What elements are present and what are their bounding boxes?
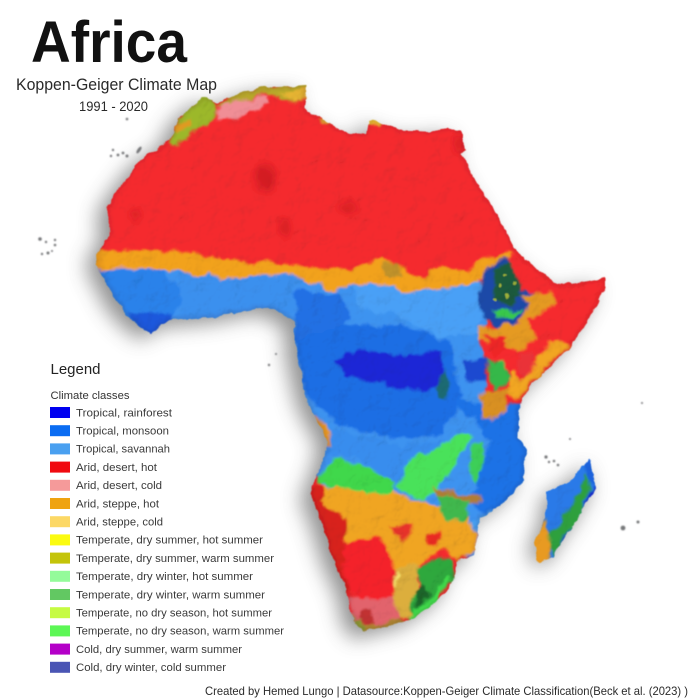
islands: Cape Verde: [38, 237, 56, 255]
region: blue savanna base: [98, 264, 494, 559]
legend item: Arid, steppe, hot: Arid, steppe, hot: [76, 498, 159, 510]
region: Cameroon monsoon: [295, 290, 352, 345]
legend subheading: Climate classes: [50, 390, 130, 402]
region: Tanzania steppe: [480, 388, 508, 422]
region: Gabon steppe: [314, 418, 330, 447]
region: Somalia steppe coast: [505, 340, 570, 398]
region: Congo monsoon: [296, 325, 462, 440]
region: horn of Africa red: [497, 250, 606, 384]
region: Sudan brown patch: [380, 264, 402, 276]
Madagascar highlands green: [548, 474, 590, 560]
date range: 1991 - 2020: [79, 98, 148, 114]
region: Karoo steppe cold: [392, 562, 420, 618]
region: Algeria coast: [216, 82, 310, 107]
islands: Gulf of Guinea: [268, 353, 277, 366]
region: Morocco temperate: [170, 94, 218, 144]
region: SE coast bright green: [408, 578, 452, 624]
region: Zimbabwe red patch: [427, 532, 442, 545]
region: Kenya highlands green: [488, 360, 510, 390]
map shadow: [87, 92, 595, 639]
region: Mozambique coast savanna: [472, 508, 494, 532]
region: Atlas cold desert: [216, 96, 268, 120]
region: Sahel steppe: [90, 250, 512, 294]
region: Albertine rift: [438, 368, 450, 400]
region: Ethiopia bright green: [492, 308, 524, 320]
region: Cape dark red: [358, 608, 374, 630]
subtitle: Koppen-Geiger Climate Map: [16, 76, 217, 94]
legend item: Tropical, rainforest: Tropical, rainforest: [76, 407, 172, 419]
region: Congo south savanna: [318, 425, 445, 482]
legend item: Arid, desert, hot: Arid, desert, hot: [76, 462, 157, 474]
Madagascar east rainforest: [552, 480, 600, 562]
region: Cape green tip: [350, 614, 362, 636]
region: Kalahari desert: [344, 535, 398, 597]
region: Angola west green: [318, 458, 395, 494]
terrain: coast edge shading: [97, 85, 605, 632]
region: Tunisia steppe: [278, 86, 310, 101]
region: Malawi green: [470, 443, 484, 480]
region: Namib coast: [310, 484, 351, 594]
region: southern Africa steppe: [320, 486, 475, 575]
region: Zambezi brown belt: [430, 486, 482, 504]
legend item: Temperate, no dry season, warm summer: Temperate, no dry season, warm summer: [76, 626, 284, 638]
region: Kenya red: [485, 334, 510, 356]
region: arid desert hot north: [98, 86, 532, 622]
legend item: Temperate, no dry season, hot summer: Temperate, no dry season, hot summer: [76, 608, 272, 620]
region: Botswana red patch: [390, 525, 414, 542]
region: south coast tan: [362, 618, 410, 636]
Madagascar north monsoon: [584, 458, 598, 486]
region: Cyrenaica steppe: [366, 116, 384, 126]
islands: Seychelles, Comoros and Mascarene: [544, 402, 643, 530]
region: upper Guinea dark monsoon: [128, 312, 172, 336]
terrain: dark massifs: [130, 137, 462, 238]
region: rainforest: [335, 350, 446, 392]
legend heading: Legend: [50, 361, 100, 378]
legend item: Arid, steppe, cold: Arid, steppe, cold: [76, 516, 163, 528]
terrain: relief texture: [90, 80, 615, 640]
region: cold desert Cape: [350, 598, 402, 634]
region: Libya coast steppe: [318, 116, 332, 127]
map: Africa climate regions: [80, 80, 615, 640]
legend item: Arid, desert, cold: Arid, desert, cold: [76, 480, 162, 492]
legend item: Temperate, dry summer, hot summer: Temperate, dry summer, hot summer: [76, 535, 263, 547]
map: Madagascar: [530, 455, 600, 567]
region: eastern South Africa green: [410, 555, 455, 622]
legend item: Cold, dry summer, warm summer: Cold, dry summer, warm summer: [76, 644, 242, 656]
Madagascar base: [534, 460, 595, 562]
legend item: Cold, dry winter, cold summer: Cold, dry winter, cold summer: [76, 662, 226, 674]
region: Zimbabwe green: [436, 494, 470, 522]
region: central west savanna: [180, 287, 184, 297]
title: Africa: [31, 10, 188, 75]
region: north Congo savanna: [352, 280, 482, 338]
region: Morocco steppe: [174, 118, 192, 134]
region: Tanzania monsoon: [456, 398, 528, 515]
region: Ethiopia dark green: [492, 264, 522, 306]
region: Kenya arid patch: [518, 354, 538, 376]
Madagascar southwest steppe: [530, 520, 550, 566]
islands: [38, 118, 643, 530]
legend: [50, 361, 284, 674]
islands: Madeira and Canaries: [110, 118, 143, 158]
region: Ethiopia dark highlands: [478, 258, 542, 328]
legend item: Tropical, savannah: Tropical, savannah: [76, 444, 170, 456]
region: west coast monsoon: [100, 268, 182, 322]
legend item: Temperate, dry winter, hot summer: Temperate, dry winter, hot summer: [76, 571, 253, 583]
terrain: Ethiopia mottling: [492, 274, 516, 302]
region: Eritrea steppe: [480, 292, 556, 350]
region: pale yellow patch: [390, 573, 399, 588]
region: Drakensberg dark green: [414, 584, 430, 608]
legend item: Temperate, dry winter, warm summer: Temperate, dry winter, warm summer: [76, 589, 265, 601]
legend item: Temperate, dry summer, warm summer: Temperate, dry summer, warm summer: [76, 553, 274, 565]
Madagascar relief: [530, 455, 600, 567]
region: Rift dark rainforest: [462, 360, 488, 382]
region: Zambia green: [396, 432, 474, 502]
legend item: Tropical, monsoon: Tropical, monsoon: [76, 426, 169, 438]
